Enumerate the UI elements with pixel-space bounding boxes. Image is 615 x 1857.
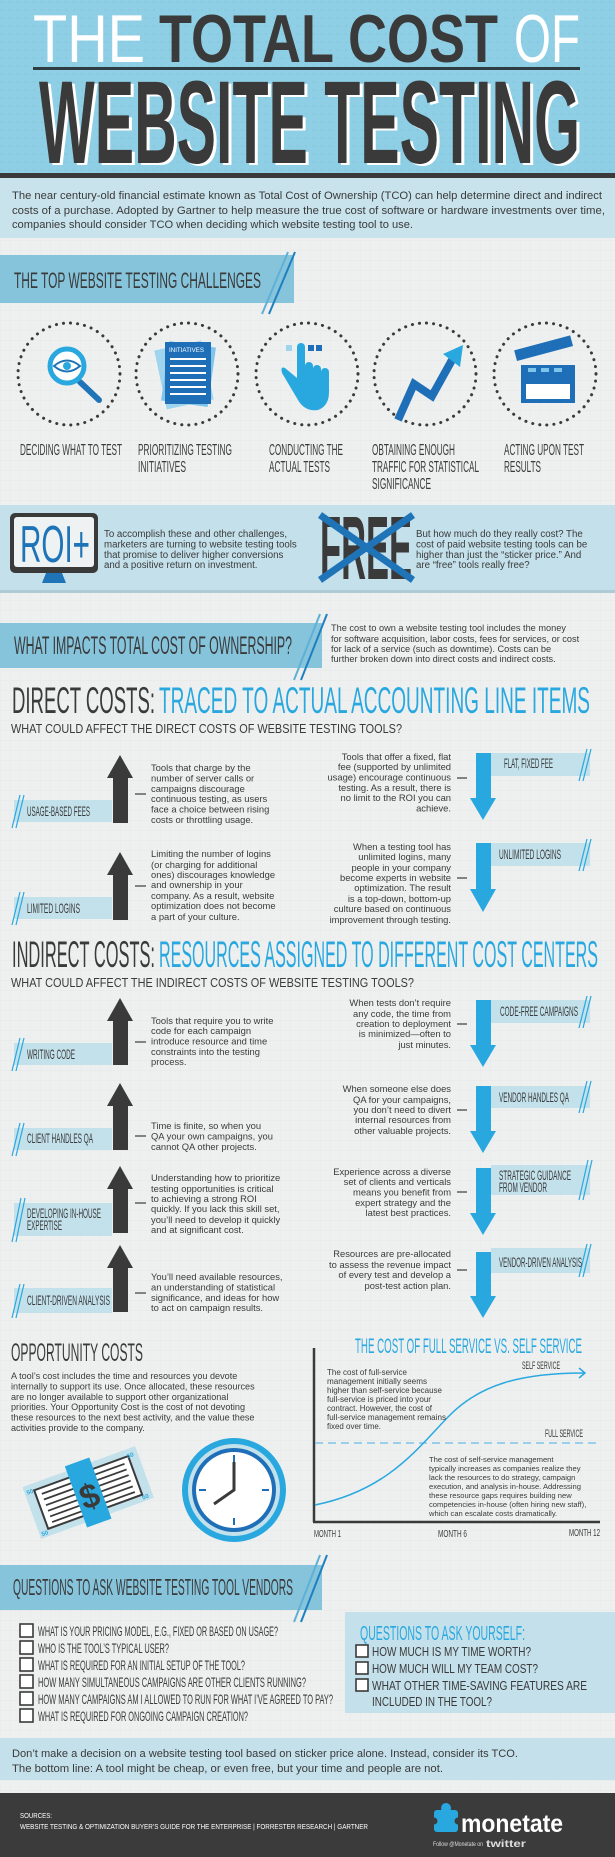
row: strategic guidance: latest best practices. bbox=[366, 1207, 451, 1218]
chart: full service vs self service: these resource gaps requires building new bbox=[429, 1491, 572, 1500]
row: unlimited logins: is a top-down, bottom-up bbox=[348, 893, 451, 904]
row: limited logins: and ownership in your bbox=[151, 879, 243, 890]
row: limited logins: LIMITED LOGINS bbox=[27, 900, 80, 916]
challenge labels: SIGNIFICANCE bbox=[372, 476, 431, 493]
intro text: The near century-old financial estimate known as Total Cost of Ownership (TCO) can help determine direct and indirect bbox=[12, 190, 602, 202]
row: client handles QA: Time is finite, so when you bbox=[151, 1120, 261, 1131]
icon: initiatives document: INITIATIVES bbox=[169, 348, 204, 354]
row: writing code: WRITING CODE bbox=[27, 1046, 75, 1062]
row: usage-based fees: campaigns discourage bbox=[151, 783, 245, 794]
row: flat fixed fee bbox=[327, 749, 591, 820]
icon: initiatives document bbox=[154, 341, 216, 409]
challenge labels bbox=[20, 442, 584, 493]
footer: WEBSITE TESTING & OPTIMIZATION BUYER’S GUIDE FOR THE ENTERPRISE | FORRESTER RESEARCH | GARTNER bbox=[20, 1824, 368, 1831]
row: vendor handles QA bbox=[343, 1081, 591, 1153]
chart: full service vs self service: contract. However, the cost of bbox=[327, 1404, 433, 1413]
row: unlimited logins: culture based on continuous bbox=[334, 903, 451, 914]
challenge labels: CONDUCTING THE bbox=[269, 442, 343, 459]
row: unlimited logins: optimization. The result bbox=[354, 882, 451, 893]
panel: ROI and free: marketers are turning to website testing tools bbox=[104, 540, 297, 550]
icon: magnifier eye bbox=[50, 349, 99, 400]
icon: rising arrow bbox=[398, 345, 463, 420]
text: TCO definition: for software acquisition, labor costs, fees for services, or cost bbox=[331, 634, 580, 644]
row: client handles QA: CLIENT HANDLES QA bbox=[27, 1130, 93, 1146]
challenge labels: TRAFFIC FOR STATISTICAL bbox=[372, 459, 479, 476]
bottom line text: Don’t make a decision on a website testing tool based on sticker price alone. Instead, consider its TCO. bbox=[12, 1748, 518, 1760]
row: unlimited logins: improvement through testing. bbox=[330, 914, 451, 925]
heading: direct costs: DIRECT COSTS: bbox=[12, 680, 155, 721]
row: client-driven analysis bbox=[12, 1245, 283, 1318]
row: vendor handles QA: internal resources from bbox=[355, 1114, 451, 1125]
challenge labels: OBTAINING ENOUGH bbox=[372, 442, 455, 459]
row: strategic guidance: means you benefit from bbox=[353, 1186, 451, 1198]
title bbox=[33, 1, 583, 191]
row: code-free campaigns: any code, the time from bbox=[353, 1008, 451, 1019]
row: developing in-house expertise: you’ll need to develop it quickly bbox=[151, 1214, 281, 1225]
row: writing code: code for each campaign bbox=[151, 1025, 251, 1036]
chart: full service vs self service: The cost of full-service bbox=[327, 1368, 407, 1377]
row: unlimited logins: people in your company bbox=[351, 862, 451, 873]
row: limited logins: company. As a result, website bbox=[151, 890, 274, 901]
row: client-driven analysis: You’ll need available resources, bbox=[151, 1271, 283, 1282]
row: developing in-house expertise: Understanding how to prioritize bbox=[151, 1172, 280, 1183]
row: flat fixed fee: Tools that offer a fixed, flat bbox=[342, 751, 451, 762]
row: vendor-driven analysis: to assess the revenue impact bbox=[329, 1259, 451, 1270]
footer bbox=[0, 1793, 615, 1857]
row: flat fixed fee: FLAT, FIXED FEE bbox=[504, 755, 553, 771]
chart: full service vs self service: execution, and analysis in-house. Addressing bbox=[429, 1482, 581, 1491]
row: developing in-house expertise: EXPERTISE bbox=[27, 1217, 62, 1233]
heading: indirect costs: WHAT COULD AFFECT THE INDIRECT COSTS OF WEBSITE TESTING TOOLS? bbox=[11, 975, 414, 990]
row: code-free campaigns: is minimized—often to bbox=[359, 1028, 451, 1039]
row: client-driven analysis: significance, and ideas for how bbox=[151, 1292, 279, 1303]
row: vendor handles QA: other valuable projects. bbox=[354, 1125, 451, 1136]
row: strategic guidance bbox=[333, 1160, 592, 1235]
row: vendor-driven analysis bbox=[329, 1244, 591, 1318]
bottom line text: The bottom line: A tool might be cheap, or even free, but your time and people are not. bbox=[12, 1763, 443, 1775]
icon: money bill: 50 bbox=[41, 1530, 50, 1538]
panel: questions to ask yourself: HOW MUCH WILL MY TEAM COST? bbox=[372, 1662, 538, 1676]
row: developing in-house expertise: to achieving a strong ROI bbox=[151, 1193, 257, 1204]
heading: indirect costs: INDIRECT COSTS: bbox=[12, 934, 155, 975]
row: client-driven analysis: an understanding of statistical bbox=[151, 1282, 275, 1292]
checklist: vendor questions: WHAT IS YOUR PRICING MODEL, E.G., FIXED OR BASED ON USAGE? bbox=[38, 1623, 278, 1639]
chart: full service vs self service: which can escalate costs dramatically. bbox=[428, 1509, 557, 1518]
checklist: vendor questions: WHAT IS REQUIRED FOR AN INITIAL SETUP OF THE TOOL? bbox=[38, 1657, 245, 1673]
checklist: vendor questions bbox=[20, 1623, 333, 1724]
icon: ROI monitor bbox=[10, 513, 98, 583]
icon: money bill: 50 bbox=[26, 1489, 35, 1497]
row: strategic guidance: FROM VENDOR bbox=[499, 1179, 547, 1195]
panel: questions to ask yourself: HOW MUCH IS MY TIME WORTH? bbox=[372, 1645, 531, 1659]
chart: full service vs self service: SELF SERVICE bbox=[522, 1360, 560, 1372]
row: limited logins: optimization does not become bbox=[151, 900, 276, 911]
header band bbox=[0, 0, 615, 178]
panel: ROI and free: cost of paid website testing tools can be bbox=[416, 540, 587, 550]
challenge labels: ACTUAL TESTS bbox=[269, 459, 330, 476]
row: usage-based fees: number of server calls or bbox=[151, 772, 254, 784]
row: flat fixed fee: no limit to the ROI you can bbox=[341, 792, 451, 803]
checklist: vendor questions: WHO IS THE TOOL’S TYPICAL USER? bbox=[38, 1640, 169, 1656]
row: vendor handles QA: When someone else does bbox=[343, 1083, 451, 1094]
logo: monetate bbox=[430, 1803, 563, 1850]
challenge labels: RESULTS bbox=[504, 459, 541, 476]
chart: full service vs self service: lack the resources to do strategy, campaign bbox=[429, 1473, 575, 1482]
row: usage-based fees bbox=[12, 755, 269, 828]
heading: direct costs: WHAT COULD AFFECT THE DIRECT COSTS OF WEBSITE TESTING TOOLS? bbox=[11, 721, 402, 736]
row: code-free campaigns: creation to deployment bbox=[356, 1018, 451, 1029]
row: flat fixed fee: achieve. bbox=[416, 802, 451, 814]
icon: money bill bbox=[21, 1441, 156, 1544]
row: usage-based fees: continuous testing, as users bbox=[151, 793, 268, 804]
checklist: vendor questions: HOW MANY SIMULTANEOUS CAMPAIGNS ARE OTHER CLIENTS RUNNING? bbox=[38, 1674, 306, 1690]
row: usage-based fees: Tools that charge by the bbox=[151, 762, 251, 773]
icon: money bill: $ bbox=[74, 1476, 105, 1518]
row: strategic guidance: Experience across a diverse bbox=[333, 1166, 451, 1177]
row: unlimited logins bbox=[330, 839, 591, 925]
row: strategic guidance: expert strategy and the bbox=[355, 1197, 451, 1208]
text: opportunity costs: A tool’s cost includes the time and resources you devote bbox=[11, 1371, 237, 1381]
heading: questions for vendors bbox=[0, 1555, 327, 1622]
chart: full service vs self service: typically increases as companies realize they bbox=[429, 1464, 581, 1473]
icon: clock bbox=[182, 1438, 286, 1542]
logo: monetate: monetate bbox=[461, 1810, 563, 1838]
panel: ROI and free: that promise to deliver higher conversions bbox=[104, 550, 283, 561]
row: usage-based fees: face a choice between rising bbox=[151, 804, 269, 814]
row: writing code: Tools that require you to write bbox=[151, 1015, 273, 1026]
logo: monetate: Follow @Monetate on bbox=[433, 1841, 483, 1848]
chart: full service vs self service: full-service management remains bbox=[327, 1413, 446, 1422]
row: writing code: process. bbox=[151, 1056, 186, 1067]
challenge labels: DECIDING WHAT TO TEST bbox=[20, 442, 122, 459]
panel: ROI and free bbox=[0, 499, 615, 599]
checklist: vendor questions: WHAT IS REQUIRED FOR ONGOING CAMPAIGN CREATION? bbox=[38, 1708, 248, 1724]
text: opportunity costs: these resources to the next best activity, and the value these bbox=[11, 1412, 254, 1422]
title: OF bbox=[514, 1, 580, 77]
challenge labels: INITIATIVES bbox=[138, 459, 186, 476]
footer: SOURCES: bbox=[20, 1813, 52, 1820]
panel: ROI and free: and a positive return on investment. bbox=[104, 560, 257, 571]
panel: questions to ask yourself: INCLUDED IN THE TOOL? bbox=[372, 1695, 492, 1709]
row: client-driven analysis: to act on campaign results. bbox=[151, 1302, 263, 1313]
text: opportunity costs: priorities. Your Opportunity Cost is the cost of not devoting bbox=[11, 1402, 245, 1412]
row: usage-based fees: USAGE-BASED FEES bbox=[27, 803, 90, 819]
row: limited logins bbox=[12, 848, 276, 925]
icon: ROI monitor: ROI+ bbox=[20, 516, 90, 574]
panel: ROI and free: FREE bbox=[320, 499, 412, 599]
chart: full service vs self service: higher than self-service because bbox=[327, 1386, 442, 1395]
row: unlimited logins: When a testing tool has bbox=[353, 841, 451, 852]
row: limited logins: (or charging for additional bbox=[151, 859, 257, 870]
chart: full service vs self service: management initially seems bbox=[327, 1377, 427, 1386]
icon: money bill: 50 bbox=[142, 1493, 151, 1502]
icon: pointing hand bbox=[281, 343, 329, 410]
row: code-free campaigns: When tests don’t require bbox=[349, 997, 451, 1008]
row: usage-based fees: costs or throttling usage. bbox=[151, 814, 253, 825]
row: client handles QA: cannot QA other projects. bbox=[151, 1141, 257, 1152]
intro text: companies should consider TCO when deciding which website testing tool to use. bbox=[12, 219, 413, 231]
intro text bbox=[0, 178, 615, 238]
title: TOTAL COST bbox=[159, 1, 498, 77]
row: strategic guidance: set of clients and verticals bbox=[344, 1176, 451, 1187]
chart: full service vs self service: The cost of self-service management bbox=[429, 1455, 554, 1464]
row: developing in-house expertise: and at significant cost. bbox=[151, 1224, 244, 1235]
panel: questions to ask yourself bbox=[345, 1612, 615, 1713]
panel: ROI and free: higher than just the “sticker price.” And bbox=[416, 550, 581, 561]
row: client handles QA bbox=[12, 1083, 273, 1156]
row: writing code bbox=[12, 998, 273, 1071]
logo: monetate: twitter bbox=[486, 1839, 526, 1850]
row: writing code: introduce resource and time bbox=[151, 1036, 267, 1046]
row: developing in-house expertise: quickly. If you lack this skill set, bbox=[151, 1203, 280, 1214]
row: vendor-driven analysis: Resources are pre-allocated bbox=[333, 1248, 451, 1259]
icon: crossed out FREE bbox=[320, 499, 413, 599]
row: vendor-driven analysis: of every test and develop a bbox=[338, 1269, 452, 1280]
row: limited logins: a part of your culture. bbox=[151, 911, 240, 922]
text: TCO definition: The cost to own a website testing tool includes the money bbox=[331, 623, 566, 633]
row: developing in-house expertise bbox=[12, 1166, 281, 1242]
row: developing in-house expertise: DEVELOPING IN-HOUSE bbox=[27, 1205, 101, 1221]
icon: clapperboard bbox=[514, 335, 575, 403]
heading: top challenges: THE TOP WEBSITE TESTING CHALLENGES bbox=[14, 268, 261, 293]
row: code-free campaigns: just minutes. bbox=[397, 1039, 451, 1050]
chart: full service vs self service: full-service is priced into your bbox=[327, 1395, 431, 1404]
chart: full service vs self service: competencies in-house (often hiring new staff), bbox=[429, 1500, 586, 1509]
chart: full service vs self service: MONTH 1 bbox=[314, 1529, 341, 1540]
row: code-free campaigns bbox=[349, 996, 591, 1067]
text: opportunity costs: internally to support its use. Once allocated, these resources bbox=[11, 1382, 255, 1392]
chart: full service vs self service: fixed over time. bbox=[327, 1422, 381, 1431]
row: client-driven analysis: CLIENT-DRIVEN ANALYSIS bbox=[27, 1292, 110, 1308]
row: limited logins: Limiting the number of logins bbox=[151, 848, 271, 859]
row: unlimited logins: become experts in website bbox=[340, 872, 451, 883]
row: vendor-driven analysis: post-test action plan. bbox=[364, 1280, 451, 1291]
heading: top challenges bbox=[0, 252, 295, 314]
text: opportunity costs: activities provide to the company. bbox=[11, 1423, 145, 1433]
row: vendor handles QA: QA for your campaigns, bbox=[353, 1094, 451, 1105]
heading: direct costs bbox=[11, 680, 590, 736]
panel: ROI and free: To accomplish these and other challenges, bbox=[104, 529, 287, 540]
row: flat fixed fee: fee (supported by unlimited bbox=[338, 761, 451, 772]
row: limited logins: ones) discourages knowledge bbox=[151, 869, 275, 880]
row: client handles QA: QA your own campaigns, you bbox=[151, 1130, 273, 1142]
heading: what impacts TCO: WHAT IMPACTS TOTAL COST OF OWNERSHIP? bbox=[14, 632, 292, 660]
row: unlimited logins: unlimited logins, many bbox=[358, 851, 451, 862]
icon: money bill: 50 bbox=[127, 1452, 135, 1460]
row: writing code: constraints into the testing bbox=[151, 1046, 260, 1057]
chart: full service vs self service: MONTH 6 bbox=[438, 1529, 467, 1540]
intro text: costs of a purchase. Adopted by Gartner to help measure the true cost of software or hardware investments over time, bbox=[12, 205, 605, 217]
row: flat fixed fee: usage) encourage continuous bbox=[327, 772, 451, 782]
text: OPPORTUNITY COSTS bbox=[11, 1339, 143, 1367]
challenge labels: PRIORITIZING TESTING bbox=[138, 442, 232, 459]
challenge circles bbox=[18, 323, 596, 425]
chart: full service vs self service bbox=[313, 1335, 600, 1540]
row: developing in-house expertise: testing opportunities is critical bbox=[151, 1183, 273, 1194]
panel: ROI and free: But how much do they really cost? The bbox=[416, 529, 583, 540]
heading: indirect costs bbox=[11, 934, 598, 990]
panel: ROI and free: are “free” tools really free? bbox=[416, 560, 530, 571]
heading: what impacts TCO bbox=[0, 614, 327, 680]
title: THE bbox=[33, 1, 145, 77]
text: TCO definition: further broken down into direct costs and indirect costs. bbox=[331, 654, 556, 664]
row: flat fixed fee: testing. As a result, there is bbox=[338, 782, 451, 793]
text: opportunity costs: are no longer available to support other organizational bbox=[11, 1392, 228, 1402]
checklist: vendor questions: HOW MANY CAMPAIGNS AM I ALLOWED TO RUN FOR WHAT I’VE AGREED TO PAY? bbox=[38, 1691, 333, 1707]
row: vendor handles QA: you don’t need to divert bbox=[354, 1104, 451, 1115]
text: TCO definition: for lack of a service (such as downtime). Costs can be bbox=[331, 644, 551, 654]
bottom line text bbox=[0, 1738, 615, 1780]
